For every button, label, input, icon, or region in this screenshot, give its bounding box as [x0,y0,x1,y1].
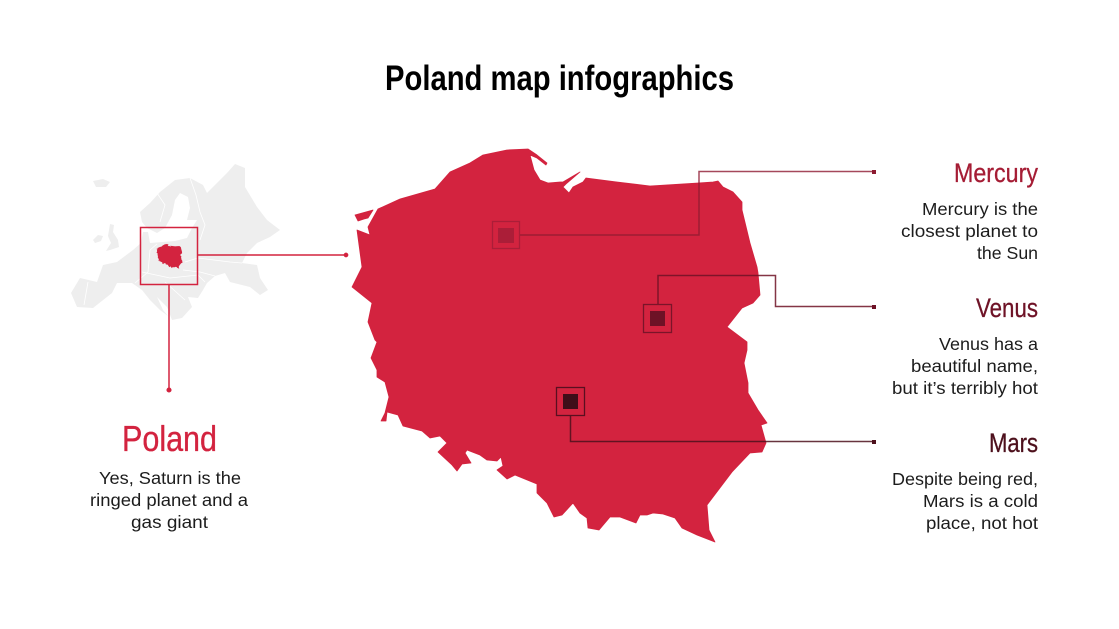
text: Poland description [90,468,248,532]
text: Venus description: beautiful name, [911,356,1038,376]
heading: Mercury: Mercury [954,158,1038,188]
marker: Mars [556,388,876,444]
heading: Venus: Venus [976,293,1038,323]
text: Poland description: ringed planet and a [90,490,248,510]
marker: Venus [644,276,876,332]
text: Mars description: place, not hot [926,513,1038,533]
text: Mars description: Mars is a cold [923,491,1038,511]
text: Venus description: Venus has a [939,334,1038,354]
heading: Mars: Mars [989,428,1038,458]
locator box and connectors [140,228,348,392]
map: Poland (main) [352,149,767,542]
title: Poland map infographics [385,59,734,98]
text: Mercury description: Mercury is the [922,199,1038,219]
text: Venus description: but it’s terribly hot [892,378,1038,398]
Europe locator map [71,164,280,320]
map: Europe landmass [71,164,280,320]
locator: Poland highlight [157,244,183,269]
text: Mercury description: the Sun [977,243,1038,263]
text: Mercury description: closest planet to [901,221,1038,241]
text: Venus description [892,334,1038,398]
text: Mars description [892,469,1038,533]
text: Poland description: Yes, Saturn is the [99,468,241,488]
marker: Mercury [492,170,876,248]
text: Mercury description [901,199,1038,263]
map: internal borders [84,178,242,305]
text: Poland description: gas giant [131,512,208,532]
heading: Poland: Poland [122,418,217,459]
text: Mars description: Despite being red, [892,469,1038,489]
